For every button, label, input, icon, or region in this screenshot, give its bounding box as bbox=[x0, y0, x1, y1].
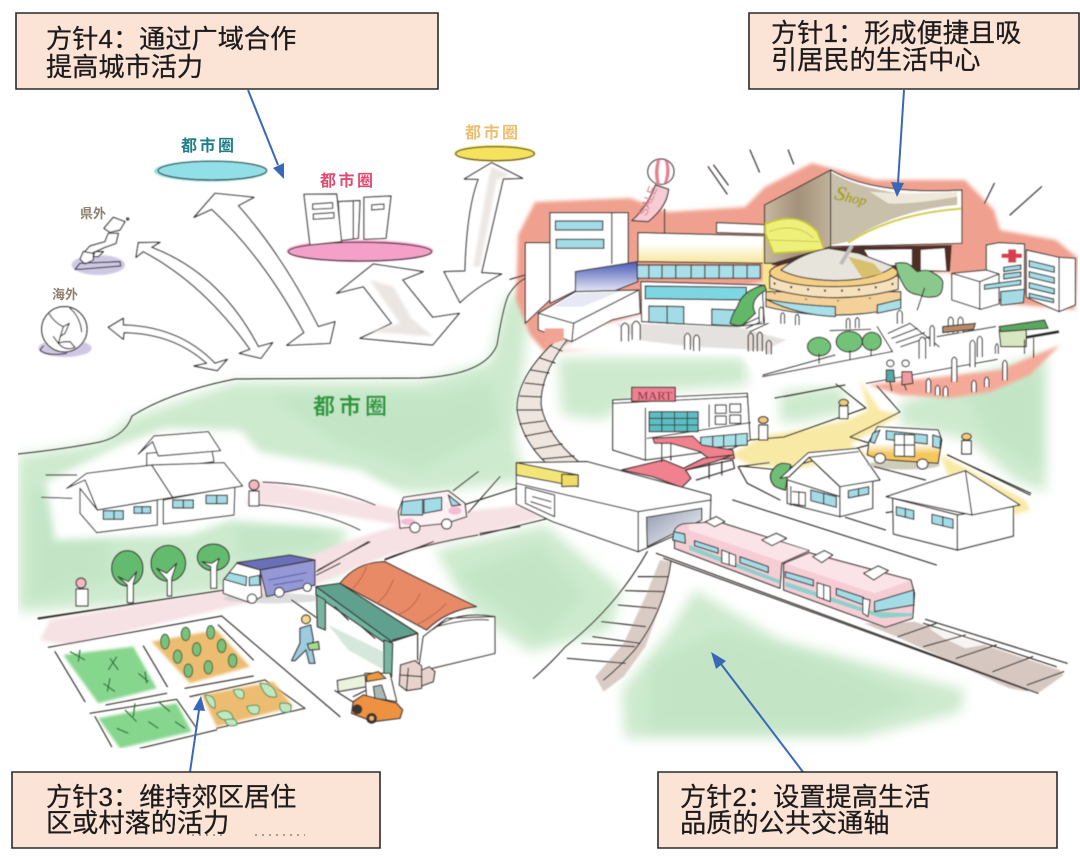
yellow bus bbox=[867, 427, 942, 470]
track: main line bbox=[656, 553, 1067, 693]
arrow: pink metro zigzag bbox=[337, 264, 459, 345]
farm houses bbox=[42, 432, 243, 533]
tram stop with green roof bbox=[999, 320, 1059, 357]
pedestrians and plaza lines bbox=[615, 307, 1007, 397]
arrow: policy 4 bbox=[248, 90, 284, 179]
field: green bottom left bbox=[98, 703, 192, 748]
shop building with yellow text bbox=[765, 170, 962, 272]
purple patches bbox=[72, 255, 125, 275]
bus stop signs, left side bbox=[76, 480, 259, 606]
balloon: sale: SALE bbox=[636, 184, 661, 218]
yellow road bbox=[730, 355, 1030, 515]
city centre: office, blue building, main building bbox=[510, 150, 1042, 347]
worker bbox=[292, 615, 319, 663]
callout: policy 4: 方针4：通过广域合作 bbox=[46, 24, 296, 54]
map of Japan bbox=[75, 217, 129, 269]
lower plaza pink bbox=[868, 345, 1060, 398]
green area label: 都市圈 bbox=[313, 394, 391, 419]
green land wash bbox=[18, 282, 1046, 738]
roads bbox=[38, 482, 550, 645]
bus stop signs, right side bbox=[759, 399, 971, 454]
minibus bbox=[398, 472, 500, 533]
track: upper curve bbox=[517, 335, 580, 463]
shop building with yellow text: Shop bbox=[833, 181, 870, 210]
warehouse bbox=[292, 562, 495, 677]
hospital bbox=[952, 243, 1075, 312]
label: yellow metro: 都市圈 bbox=[465, 123, 521, 142]
blue roof building bbox=[575, 262, 638, 292]
label: teal metro: 都市圈 bbox=[181, 136, 237, 155]
arrow: policy 2 bbox=[711, 652, 803, 772]
callout: policy 2: 品质的公共交通轴 bbox=[680, 808, 890, 838]
main commercial building bbox=[637, 223, 774, 327]
salmon city-centre background bbox=[516, 163, 1078, 370]
crop fields bbox=[48, 616, 340, 748]
callout: policy 1: 引居民的生活中心 bbox=[771, 45, 980, 75]
callout: policy 1 bbox=[749, 13, 1079, 89]
label: prefecture: 県外 bbox=[80, 206, 106, 221]
field: green top left bbox=[63, 647, 157, 703]
boxes bbox=[399, 661, 435, 691]
office building bbox=[510, 213, 628, 323]
callout: policy 2: 方针2：设置提高生活 bbox=[680, 782, 930, 812]
main left house bbox=[80, 488, 157, 533]
arrow: policy 1 bbox=[891, 90, 904, 197]
building on pink oval bbox=[304, 194, 391, 245]
mart building bbox=[613, 387, 750, 487]
station concourse bbox=[538, 290, 640, 347]
oval: pink metro bbox=[287, 240, 433, 262]
upper roof house bbox=[147, 448, 214, 468]
callout: policy 3: 区或村落的活力 bbox=[46, 808, 229, 838]
trees in plaza bbox=[730, 263, 943, 363]
balloon: sale bbox=[632, 159, 674, 233]
callout: policy 2 bbox=[658, 772, 1057, 848]
house B bbox=[886, 471, 1020, 550]
arrow: overseas bbox=[108, 318, 227, 371]
truck bbox=[223, 527, 520, 603]
boundary line of metropolitan area bbox=[18, 277, 528, 454]
station block with tunnel bbox=[516, 462, 936, 565]
labels: destinations bbox=[52, 123, 521, 302]
rays around shop bbox=[708, 150, 1042, 215]
overseas and prefecture diagram bbox=[38, 145, 536, 371]
callout: policy 3 bbox=[12, 772, 380, 848]
round building bbox=[766, 245, 901, 317]
track: lower curve bbox=[533, 552, 671, 692]
globe bbox=[40, 307, 87, 354]
callout: policy 3: 方针3：维持郊区居住 bbox=[46, 782, 296, 812]
house A bbox=[780, 448, 885, 530]
main right house bbox=[163, 487, 235, 524]
house behind tree bbox=[770, 463, 791, 490]
label: overseas: 海外 bbox=[52, 287, 78, 302]
field: orange bottom right bbox=[202, 682, 293, 727]
callout: policy 4 bbox=[16, 13, 438, 89]
arrow: policy 3 bbox=[190, 696, 205, 772]
field: orange top right bbox=[152, 630, 250, 683]
oval: teal metro bbox=[154, 160, 267, 182]
callout: policy 1: 方针1：形成便捷且吸 bbox=[771, 18, 1021, 48]
arrow: yellow metro bbox=[444, 163, 523, 303]
label: pink metro: 都市圈 bbox=[320, 171, 376, 190]
white halo around farm houses bbox=[46, 428, 420, 540]
white plaza ground bbox=[555, 272, 1078, 385]
houses and yellow bus at the station bbox=[738, 427, 1031, 550]
arrow: prefecture bbox=[136, 242, 273, 358]
tram bbox=[673, 517, 915, 627]
trees along road bbox=[38, 544, 229, 619]
forklift bbox=[335, 672, 403, 724]
arrow: top metro to city centre bbox=[194, 193, 335, 345]
oval: yellow metro bbox=[454, 145, 536, 162]
callout: policy 4: 提高城市活力 bbox=[46, 52, 203, 82]
mart building: MART bbox=[637, 389, 673, 402]
